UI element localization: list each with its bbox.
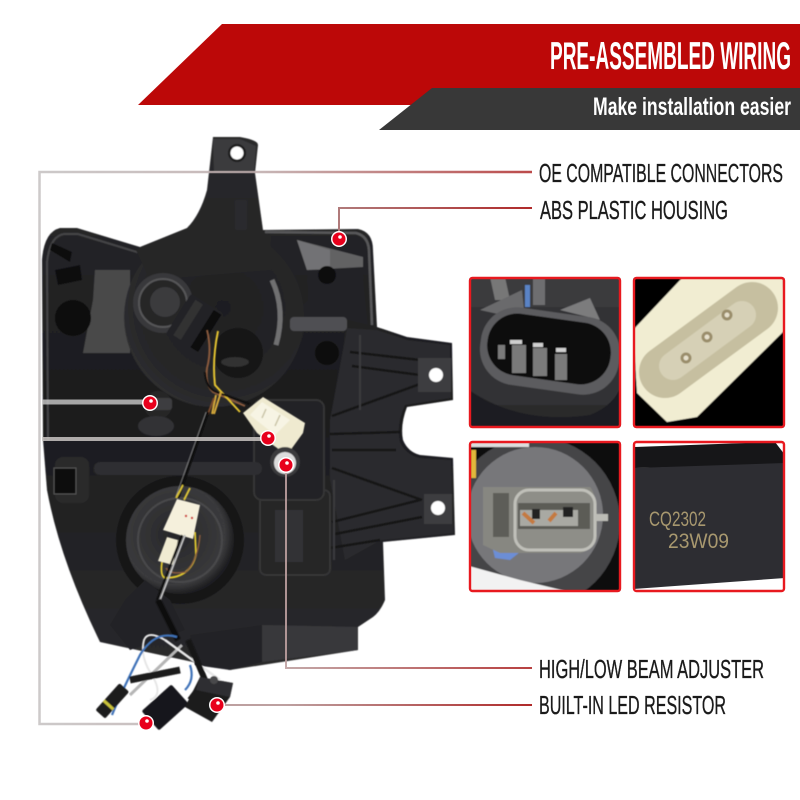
- right rim: [265, 232, 372, 325]
- detail panel: resistor date code: [633, 441, 785, 592]
- side bar: [290, 317, 347, 331]
- left lower clip: [55, 457, 89, 503]
- left and top rim: [47, 234, 185, 440]
- upper dome: [124, 227, 304, 407]
- detail panel: grey two-pin connector: [468, 440, 622, 592]
- harness channel: [110, 580, 185, 650]
- lower white connector: [157, 485, 200, 600]
- centre recess block: [260, 490, 330, 575]
- callout line: ABS plastic housing: [339, 208, 532, 235]
- holes: [55, 300, 91, 336]
- bracket mounting boss top: [418, 358, 451, 392]
- marker dot: white connector: [260, 430, 276, 446]
- lower bottom slab: [262, 625, 358, 662]
- lower lens housing: [116, 476, 244, 604]
- dome highlight: [272, 280, 280, 345]
- right bracket: [330, 328, 453, 560]
- upper wire bundle: [207, 330, 245, 406]
- callout line: OE compatible connectors: [40, 172, 532, 724]
- callout line: high/low beam adjuster: [286, 466, 532, 668]
- white harness connector: [243, 397, 305, 455]
- small bulb stem: [144, 391, 172, 419]
- bracket mounting boss bottom: [424, 494, 452, 524]
- left lit panel: [83, 270, 130, 353]
- date code text: CQ2302: [649, 508, 706, 531]
- callout line: LED resistor: [220, 704, 532, 706]
- adjuster screw: [270, 447, 300, 477]
- callout line: upper connector: [42, 400, 148, 404]
- bracket ribs: [330, 352, 422, 548]
- housing body: [42, 137, 455, 670]
- marker dot: resistor: [209, 697, 225, 713]
- headlight rear photo illustration: [42, 137, 455, 670]
- lower horizontal bar: [94, 462, 262, 475]
- small connector left: [95, 683, 129, 719]
- marker dot: lower connector: [138, 715, 154, 731]
- detail panel: grey three-pin connector: [469, 277, 625, 430]
- dust cap: [213, 328, 263, 378]
- marker dot: adjuster: [278, 457, 294, 473]
- right inner panel: [290, 268, 368, 325]
- top mounting tab: [213, 139, 256, 230]
- wiring and connectors: [95, 330, 305, 730]
- date code text: [650, 512, 728, 548]
- LED resistor box: [185, 676, 233, 722]
- marker dot: upper connector: [142, 395, 158, 411]
- detail panel: cream connector: [633, 277, 785, 428]
- date code text: 23W09: [668, 530, 729, 553]
- upper right lit panel: [297, 240, 363, 270]
- wire harness: [95, 600, 220, 730]
- connector bottom: [142, 684, 189, 730]
- header banner: dark grey: [379, 88, 800, 130]
- black wire down to lower connector: [178, 412, 208, 498]
- black bulb connector: [166, 293, 223, 354]
- callout line: white connector: [42, 437, 264, 441]
- upper socket: [133, 273, 193, 333]
- header banner: red: [138, 24, 800, 105]
- marker dot: housing: [331, 231, 347, 247]
- top-left clip: [50, 243, 82, 285]
